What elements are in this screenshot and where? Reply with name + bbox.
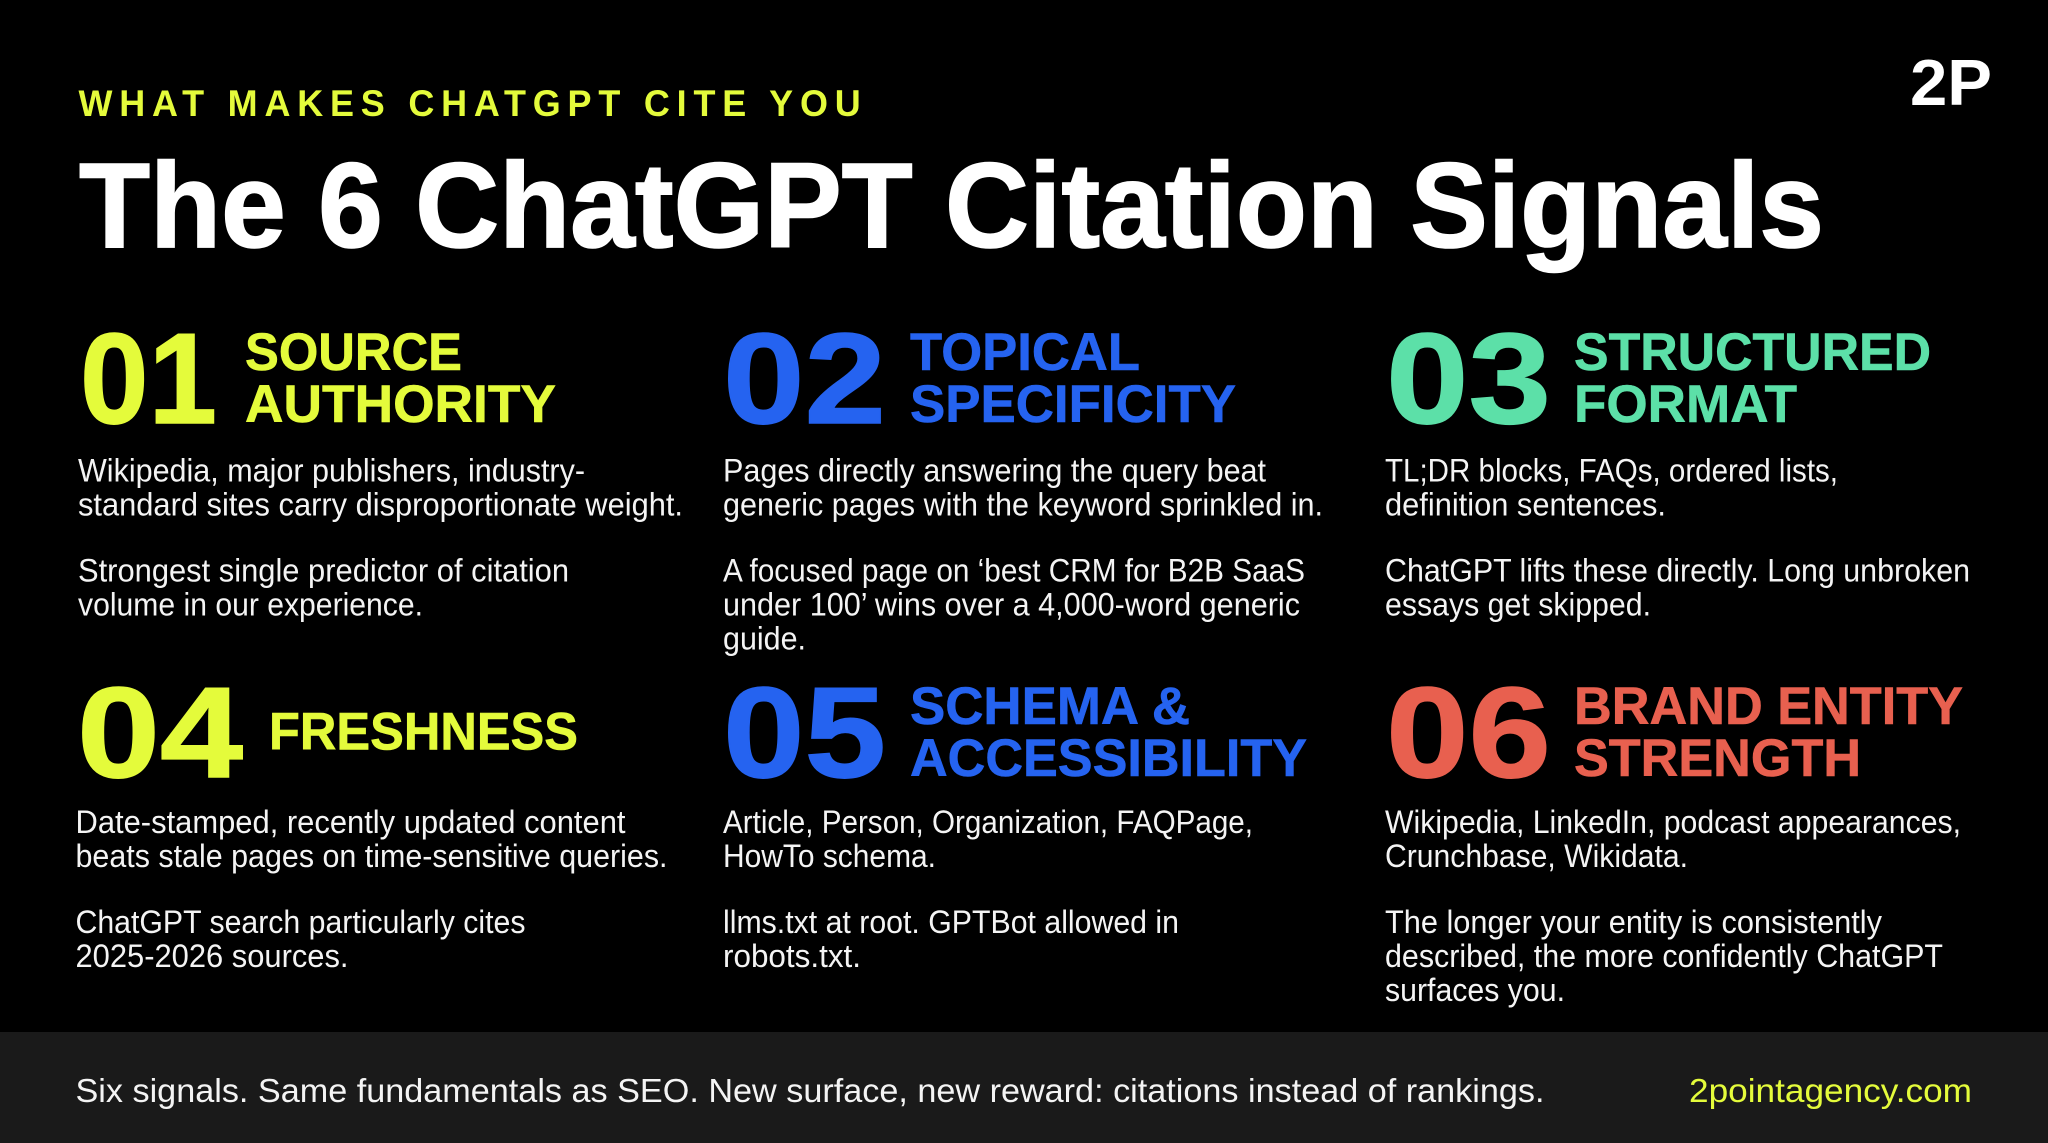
body text: Article, Person, Organization, FAQPage, bbox=[723, 804, 1253, 840]
panel: 06 brand entity strength bbox=[1385, 661, 1963, 1008]
body text: guide. bbox=[723, 620, 806, 656]
body text: Wikipedia, major publishers, industry- bbox=[78, 452, 585, 488]
body text: robots.txt. bbox=[723, 938, 861, 974]
body text: TL;DR blocks, FAQs, ordered lists, bbox=[1385, 452, 1838, 488]
heading: structured format: STRUCTURED bbox=[1574, 323, 1931, 382]
heading: schema and accessibility: ACCESSIBILITY bbox=[910, 729, 1307, 788]
body text bbox=[723, 452, 1323, 656]
footer bar bbox=[0, 1032, 2048, 1143]
body text: HowTo schema. bbox=[723, 838, 936, 874]
body text: Wikipedia, LinkedIn, podcast appearances, bbox=[1385, 804, 1961, 840]
logo: 2P: 2P bbox=[1910, 46, 1992, 119]
body text: ChatGPT search particularly cites bbox=[76, 904, 526, 940]
body text: Strongest single predictor of citation bbox=[78, 552, 569, 588]
heading: brand entity strength: BRAND ENTITY bbox=[1574, 677, 1963, 736]
number 02: 02 bbox=[723, 307, 886, 451]
body text: A focused page on ‘best CRM for B2B SaaS bbox=[723, 552, 1305, 588]
heading: structured format bbox=[1574, 323, 1931, 434]
heading: topical specificity: TOPICAL bbox=[910, 323, 1140, 382]
heading: brand entity strength: STRENGTH bbox=[1574, 729, 1861, 788]
footer message: Six signals. Same fundamentals as SEO. New surface, new reward: citations instead of rankings. bbox=[76, 1072, 1545, 1109]
body text: Pages directly answering the query beat bbox=[723, 452, 1266, 488]
body text: under 100’ wins over a 4,000-word generic bbox=[723, 586, 1300, 622]
body text: Crunchbase, Wikidata. bbox=[1385, 838, 1688, 874]
heading: topical specificity: SPECIFICITY bbox=[910, 375, 1236, 434]
body text: generic pages with the keyword sprinkled in. bbox=[723, 486, 1323, 522]
title: The 6 ChatGPT Citation Signals bbox=[79, 137, 1824, 273]
number 06: 06 bbox=[1386, 661, 1551, 805]
panel: 02 topical specificity bbox=[723, 307, 1323, 656]
number 05: 05 bbox=[723, 661, 886, 805]
eyebrow heading: WHAT MAKES CHATGPT CITE YOU bbox=[78, 83, 868, 124]
body text bbox=[76, 804, 668, 974]
body text: The longer your entity is consistently bbox=[1385, 904, 1882, 940]
body text: described, the more confidently ChatGPT bbox=[1385, 938, 1943, 974]
panel: 04 freshness bbox=[76, 661, 668, 974]
heading: freshness: FRESHNESS bbox=[269, 702, 578, 762]
heading: brand entity strength bbox=[1574, 677, 1963, 788]
heading: schema and accessibility bbox=[910, 677, 1307, 788]
heading: source authority: SOURCE bbox=[245, 323, 462, 382]
body text: ChatGPT lifts these directly. Long unbroken bbox=[1385, 552, 1970, 588]
number 01: 01 bbox=[80, 307, 217, 451]
number 04: 04 bbox=[77, 661, 243, 805]
body text: 2025-2026 sources. bbox=[76, 938, 348, 974]
body text: definition sentences. bbox=[1385, 486, 1666, 522]
body text bbox=[1385, 804, 1961, 1008]
body text: essays get skipped. bbox=[1385, 586, 1651, 622]
body text: llms.txt at root. GPTBot allowed in bbox=[723, 904, 1179, 940]
body text: beats stale pages on time-sensitive queries. bbox=[76, 838, 668, 874]
heading: topical specificity bbox=[910, 323, 1236, 434]
body text bbox=[723, 804, 1253, 974]
heading: structured format: FORMAT bbox=[1574, 375, 1797, 434]
panel: 05 schema and accessibility bbox=[723, 661, 1307, 974]
body text: Date-stamped, recently updated content bbox=[76, 804, 626, 840]
heading: source authority bbox=[245, 323, 556, 434]
body text: surfaces you. bbox=[1385, 972, 1565, 1008]
body text: standard sites carry disproportionate weight. bbox=[78, 486, 683, 522]
body text: volume in our experience. bbox=[78, 586, 423, 622]
body text bbox=[78, 452, 683, 622]
heading: source authority: AUTHORITY bbox=[245, 375, 556, 434]
footer website link: 2pointagency.com bbox=[1689, 1072, 1972, 1109]
body text bbox=[1385, 452, 1970, 622]
panel: 03 structured format bbox=[1385, 307, 1970, 622]
heading: schema and accessibility: SCHEMA & bbox=[910, 677, 1190, 736]
number 03: 03 bbox=[1386, 307, 1551, 451]
panel: 01 source authority bbox=[78, 307, 683, 622]
